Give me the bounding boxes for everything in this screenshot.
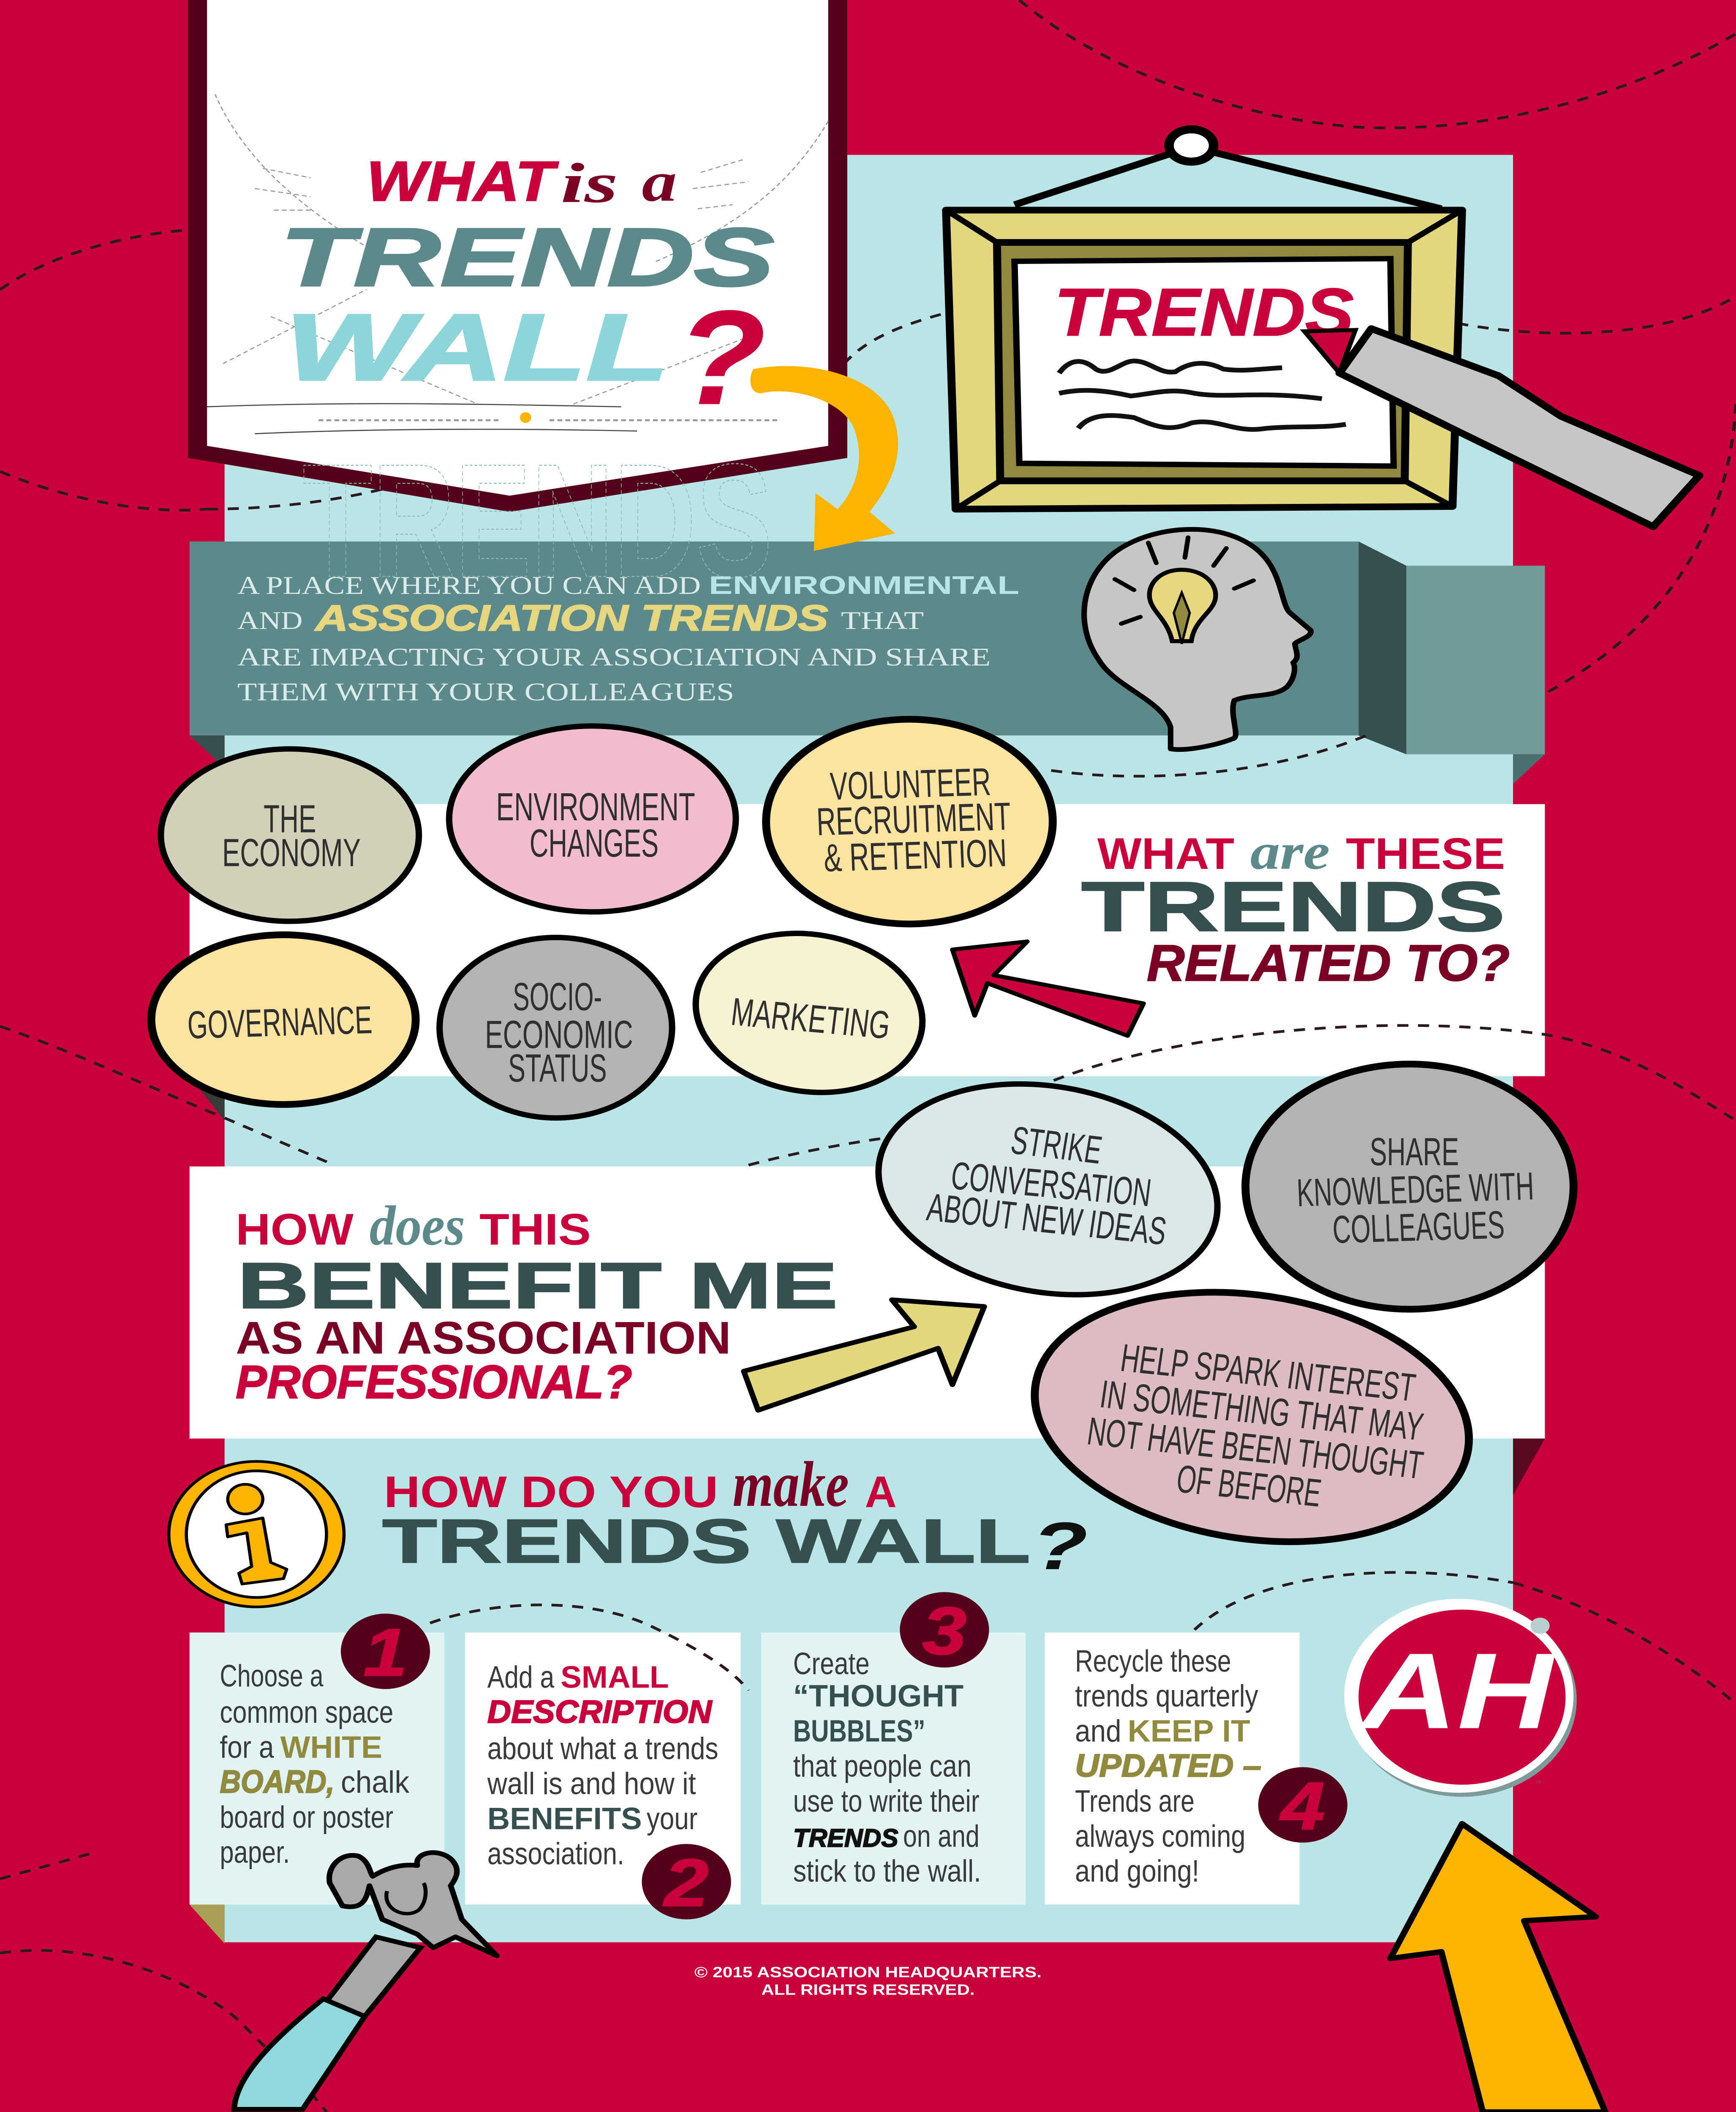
bubble: volunteer recruitment: RECRUITMENT <box>816 795 1012 844</box>
bubble: strike conversation: STRIKE <box>1008 1118 1105 1172</box>
bubble: the economy <box>161 749 419 921</box>
step 3 card: on and <box>903 1819 980 1853</box>
step 1 card: board or poster <box>220 1800 393 1835</box>
heading: what are these trends related to: THESE <box>1346 829 1505 879</box>
heading: what are these trends related to <box>1081 823 1510 992</box>
step 2 card: your <box>647 1802 698 1836</box>
bubble: the economy: ECONOMY <box>222 831 361 874</box>
title: what is a: WHAT <box>366 150 559 213</box>
bubble: socio-economic status: ECONOMIC <box>485 1013 633 1056</box>
bubble: strike conversation <box>852 1055 1244 1324</box>
ribbon text: A PLACE WHERE YOU CAN ADD <box>237 572 701 600</box>
banner <box>188 0 847 512</box>
number badge 2: 2 <box>663 1845 709 1920</box>
title: trends: TRENDS <box>280 212 774 303</box>
ribbon text: THAT <box>841 607 924 635</box>
step 2 card: SMALL <box>561 1660 669 1695</box>
bubble: marketing: MARKETING <box>729 990 892 1047</box>
marker pen <box>1304 329 1699 527</box>
heading: how do you make a trends wall: A <box>865 1467 897 1517</box>
fold: right of teal band <box>1513 754 1545 784</box>
panel: white band benefit <box>190 1166 1545 1439</box>
panel: light teal background <box>225 155 1513 1942</box>
step 2 card: about what a trends <box>487 1731 718 1766</box>
copyright: ALL RIGHTS RESERVED. <box>761 1982 975 1998</box>
step 3 card: TRENDS <box>793 1824 898 1853</box>
title: wall: WALL <box>285 294 669 400</box>
ribbon text: AND <box>237 607 302 635</box>
panel: teal ribbon <box>190 542 1545 754</box>
copyright <box>694 1964 1042 1998</box>
fold: left of teal band <box>190 735 225 768</box>
bubble: help spark interest <box>1007 1260 1497 1574</box>
title: question mark: ? <box>677 282 766 433</box>
step 4 card: always coming <box>1075 1819 1246 1853</box>
heading: how does this benefit me: THIS <box>479 1205 591 1254</box>
step 4 card: and <box>1075 1714 1121 1749</box>
bubble: strike conversation: CONVERSATION <box>949 1154 1154 1215</box>
heading: what are these trends related to: are <box>1250 823 1330 880</box>
heading: what are these trends related to: WHAT <box>1097 829 1234 879</box>
number badge 4 <box>1258 1767 1347 1843</box>
step 3 card: that people can <box>793 1749 971 1783</box>
bubble: volunteer recruitment: VOLUNTEER <box>829 760 992 808</box>
icon: head with light bulb <box>1084 529 1311 749</box>
heading: how does this benefit me: BENEFIT ME <box>237 1249 838 1322</box>
fold: step card <box>190 1905 225 1943</box>
AH logo <box>1344 1599 1577 1797</box>
title: what is a: is <box>561 152 618 215</box>
bubble: volunteer recruitment: & RETENTION <box>823 831 1008 880</box>
divider with dot <box>207 404 781 434</box>
step 1 card: common space <box>220 1695 393 1730</box>
title: what is a: a <box>642 150 677 213</box>
arrow: big gold <box>1390 1824 1605 2112</box>
bubble: share knowledge: COLLEAGUES <box>1332 1203 1505 1252</box>
step 1 card: chalk <box>341 1765 410 1800</box>
bubble: environment changes: CHANGES <box>530 822 658 865</box>
step 1 card: for a <box>220 1730 274 1765</box>
AH logo: ™ <box>1535 1780 1542 1786</box>
heading: what are these trends related to: RELATED TO? <box>1147 935 1510 992</box>
fold: first white band <box>190 1076 225 1121</box>
step 3 card <box>761 1633 1026 1905</box>
icon: info circle <box>169 1462 344 1607</box>
heading: how does this benefit me: PROFESSIONAL? <box>236 1355 632 1408</box>
step 4 card: and going! <box>1075 1854 1199 1889</box>
bubble: volunteer recruitment <box>766 719 1053 924</box>
step 1 card: BOARD, <box>220 1764 335 1800</box>
picture frame <box>946 129 1462 509</box>
heading: how do you make a trends wall: ? <box>1032 1508 1088 1584</box>
step 2 card: DESCRIPTION <box>487 1693 713 1730</box>
fold: second white band <box>1513 1439 1545 1495</box>
bubble: help spark interest: OF BEFORE <box>1174 1457 1324 1515</box>
arrow: yellow <box>744 1300 984 1410</box>
heading: how do you make a trends wall: HOW DO YOU <box>384 1467 718 1517</box>
step 4 card: Trends are <box>1075 1784 1195 1818</box>
bubble: marketing <box>675 912 944 1113</box>
copyright: © 2015 ASSOCIATION HEADQUARTERS. <box>694 1964 1042 1981</box>
heading: how does this benefit me: AS AN ASSOCIATION <box>236 1313 731 1364</box>
arrow: crimson <box>952 942 1143 1036</box>
bubble: governance <box>151 935 416 1105</box>
title: what is a <box>366 150 677 215</box>
step 1 card <box>190 1633 444 1905</box>
step 2 card: association. <box>487 1837 624 1871</box>
heading: how do you make a trends wall: TRENDS WALL <box>382 1507 1031 1576</box>
number badge 1: 1 <box>363 1615 408 1690</box>
bubble: environment changes <box>449 726 736 912</box>
ghost outline text: TRENDS <box>302 430 773 611</box>
bubble: share knowledge <box>1246 1064 1573 1309</box>
number badge 3: 3 <box>922 1593 966 1668</box>
step 4 card: UPDATED – <box>1075 1747 1261 1783</box>
heading: how does this benefit me: does <box>370 1194 465 1257</box>
number badge 1 <box>341 1614 430 1690</box>
step 2 card: Add a <box>487 1660 554 1695</box>
step 4 card <box>1045 1633 1300 1905</box>
bubble: the economy: THE <box>264 797 316 841</box>
step 3 card: use to write their <box>793 1784 980 1818</box>
bubble: strike conversation: ABOUT NEW IDEAS <box>924 1185 1169 1253</box>
ribbon text <box>237 571 1019 706</box>
AH logo: AH <box>1358 1631 1556 1751</box>
heading: how does this benefit me <box>236 1194 838 1408</box>
number badge 4: 4 <box>1279 1768 1325 1843</box>
step 3 card: stick to the wall. <box>793 1854 981 1889</box>
step 3 card: “THOUGHT <box>793 1679 963 1714</box>
step 3 card: BUBBLES” <box>793 1714 925 1749</box>
step 4 card: Recycle these <box>1075 1644 1231 1679</box>
step 1 card: Choose a <box>220 1659 324 1693</box>
bubble: share knowledge: KNOWLEDGE WITH <box>1296 1164 1535 1215</box>
bubble: share knowledge: SHARE <box>1370 1130 1459 1173</box>
number badge 2 <box>642 1844 731 1920</box>
step 1 card: paper. <box>220 1835 290 1870</box>
bubble: socio-economic status: STATUS <box>508 1046 607 1090</box>
ribbon text: ENVIRONMENTAL <box>709 571 1019 600</box>
bubble: help spark interest: IN SOMETHING THAT MAY <box>1097 1372 1426 1449</box>
step 4 card: KEEP IT <box>1128 1714 1250 1749</box>
frame heading: TRENDS <box>1054 275 1354 350</box>
bubble: socio-economic status: SOCIO- <box>513 975 602 1019</box>
arrow: curved gold <box>751 366 898 551</box>
bubble: help spark interest: HELP SPARK INTEREST <box>1118 1336 1418 1410</box>
bubble: governance: GOVERNANCE <box>187 998 373 1047</box>
bubble: environment changes: ENVIRONMENT <box>496 785 695 829</box>
heading: how does this benefit me: HOW <box>236 1205 354 1254</box>
step 2 card: BENEFITS <box>487 1802 642 1836</box>
step 1 card: WHITE <box>280 1730 382 1765</box>
ribbon text: THEM WITH YOUR COLLEAGUES <box>237 678 734 706</box>
step 2 card: wall is and how it <box>487 1766 696 1801</box>
ribbon text: ARE IMPACTING YOUR ASSOCIATION AND SHARE <box>237 643 990 671</box>
step 4 card: trends quarterly <box>1075 1679 1258 1714</box>
frame scribbles <box>1059 361 1346 430</box>
heading: how do you make a trends wall: make <box>732 1449 849 1520</box>
icon: hammer <box>234 1853 497 2109</box>
step 3 card: Create <box>793 1647 870 1681</box>
bubble: socio-economic status <box>440 937 672 1118</box>
bubble: help spark interest: NOT HAVE BEEN THOUGHT <box>1085 1409 1426 1487</box>
panel: white band trends <box>190 804 1545 1076</box>
step 2 card <box>465 1633 740 1905</box>
number badge 3 <box>900 1592 989 1668</box>
heading: how do you make a trends wall <box>382 1449 1088 1584</box>
ribbon text: ASSOCIATION TRENDS <box>314 598 828 638</box>
heading: what are these trends related to: TRENDS <box>1081 868 1505 946</box>
